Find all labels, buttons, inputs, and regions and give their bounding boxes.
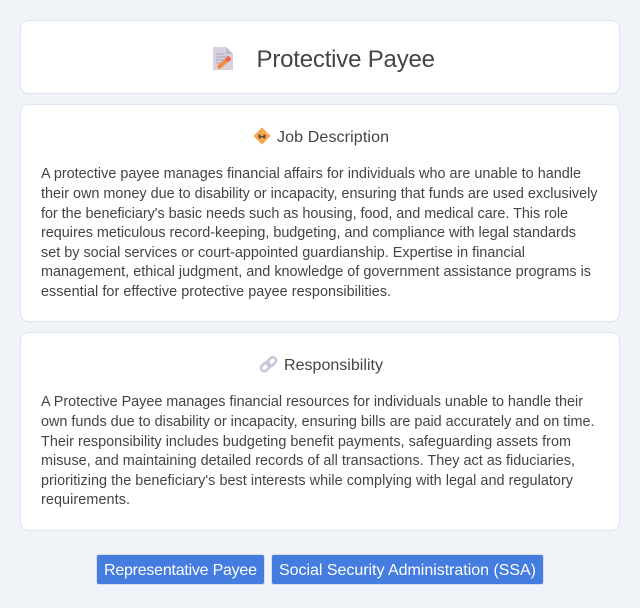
- text block: job description: A protective payee manages financial affairs for individuals who are unable to handle: [41, 166, 581, 182]
- text block: job description: their own money due to disability or incapacity, ensuring that funds are used exclusively: [41, 186, 598, 202]
- title: Protective Payee: [256, 46, 435, 73]
- text block: job description: set by social services or court-appointed guardianship. Expertise in financial: [41, 245, 525, 261]
- text block: responsibility: prioritizing the beneficiary's best interests while complying with legal and regulatory: [41, 473, 574, 489]
- icon: document with pencil: [213, 47, 233, 70]
- text block: responsibility: [41, 394, 594, 508]
- text block: job description: [41, 166, 598, 300]
- panel: title header: [20, 20, 620, 94]
- text block: job description: requires meticulous record-keeping, budgeting, and compliance with legal standards: [41, 225, 576, 241]
- text block: job description: management, ethical judgment, and knowledge of government assistance programs is: [41, 264, 591, 280]
- button: social security administration: [272, 554, 544, 584]
- text block: job description: essential for effective protective payee responsibilities.: [41, 284, 391, 300]
- heading: responsibility: Responsibility: [284, 357, 383, 374]
- icon: chain link: [260, 356, 277, 373]
- text block: responsibility: A Protective Payee manages financial resources for individuals unable to handle their: [41, 394, 583, 410]
- text block: responsibility: misuse, and maintaining detailed records of all transactions. They act as fiduciaries,: [41, 453, 575, 469]
- button: representative payee: [96, 554, 264, 584]
- panel: responsibility: [20, 332, 620, 530]
- heading: job description: Job Description: [277, 129, 389, 146]
- text block: responsibility: Their responsibility includes budgeting benefit payments, safeguarding assets from: [41, 434, 571, 450]
- button: social security administration: Social Security Administration (SSA): [279, 562, 536, 579]
- text block: responsibility: own funds due to disability or incapacity, ensuring bills are paid accurately and on time.: [41, 414, 594, 430]
- text block: job description: for the beneficiary's basic needs such as housing, food, and medical care. This role: [41, 206, 568, 222]
- panel: job description: [20, 104, 620, 322]
- button: representative payee: Representative Payee: [104, 562, 257, 579]
- icon: job description diamond: [254, 128, 270, 144]
- text block: responsibility: requirements.: [41, 492, 130, 508]
